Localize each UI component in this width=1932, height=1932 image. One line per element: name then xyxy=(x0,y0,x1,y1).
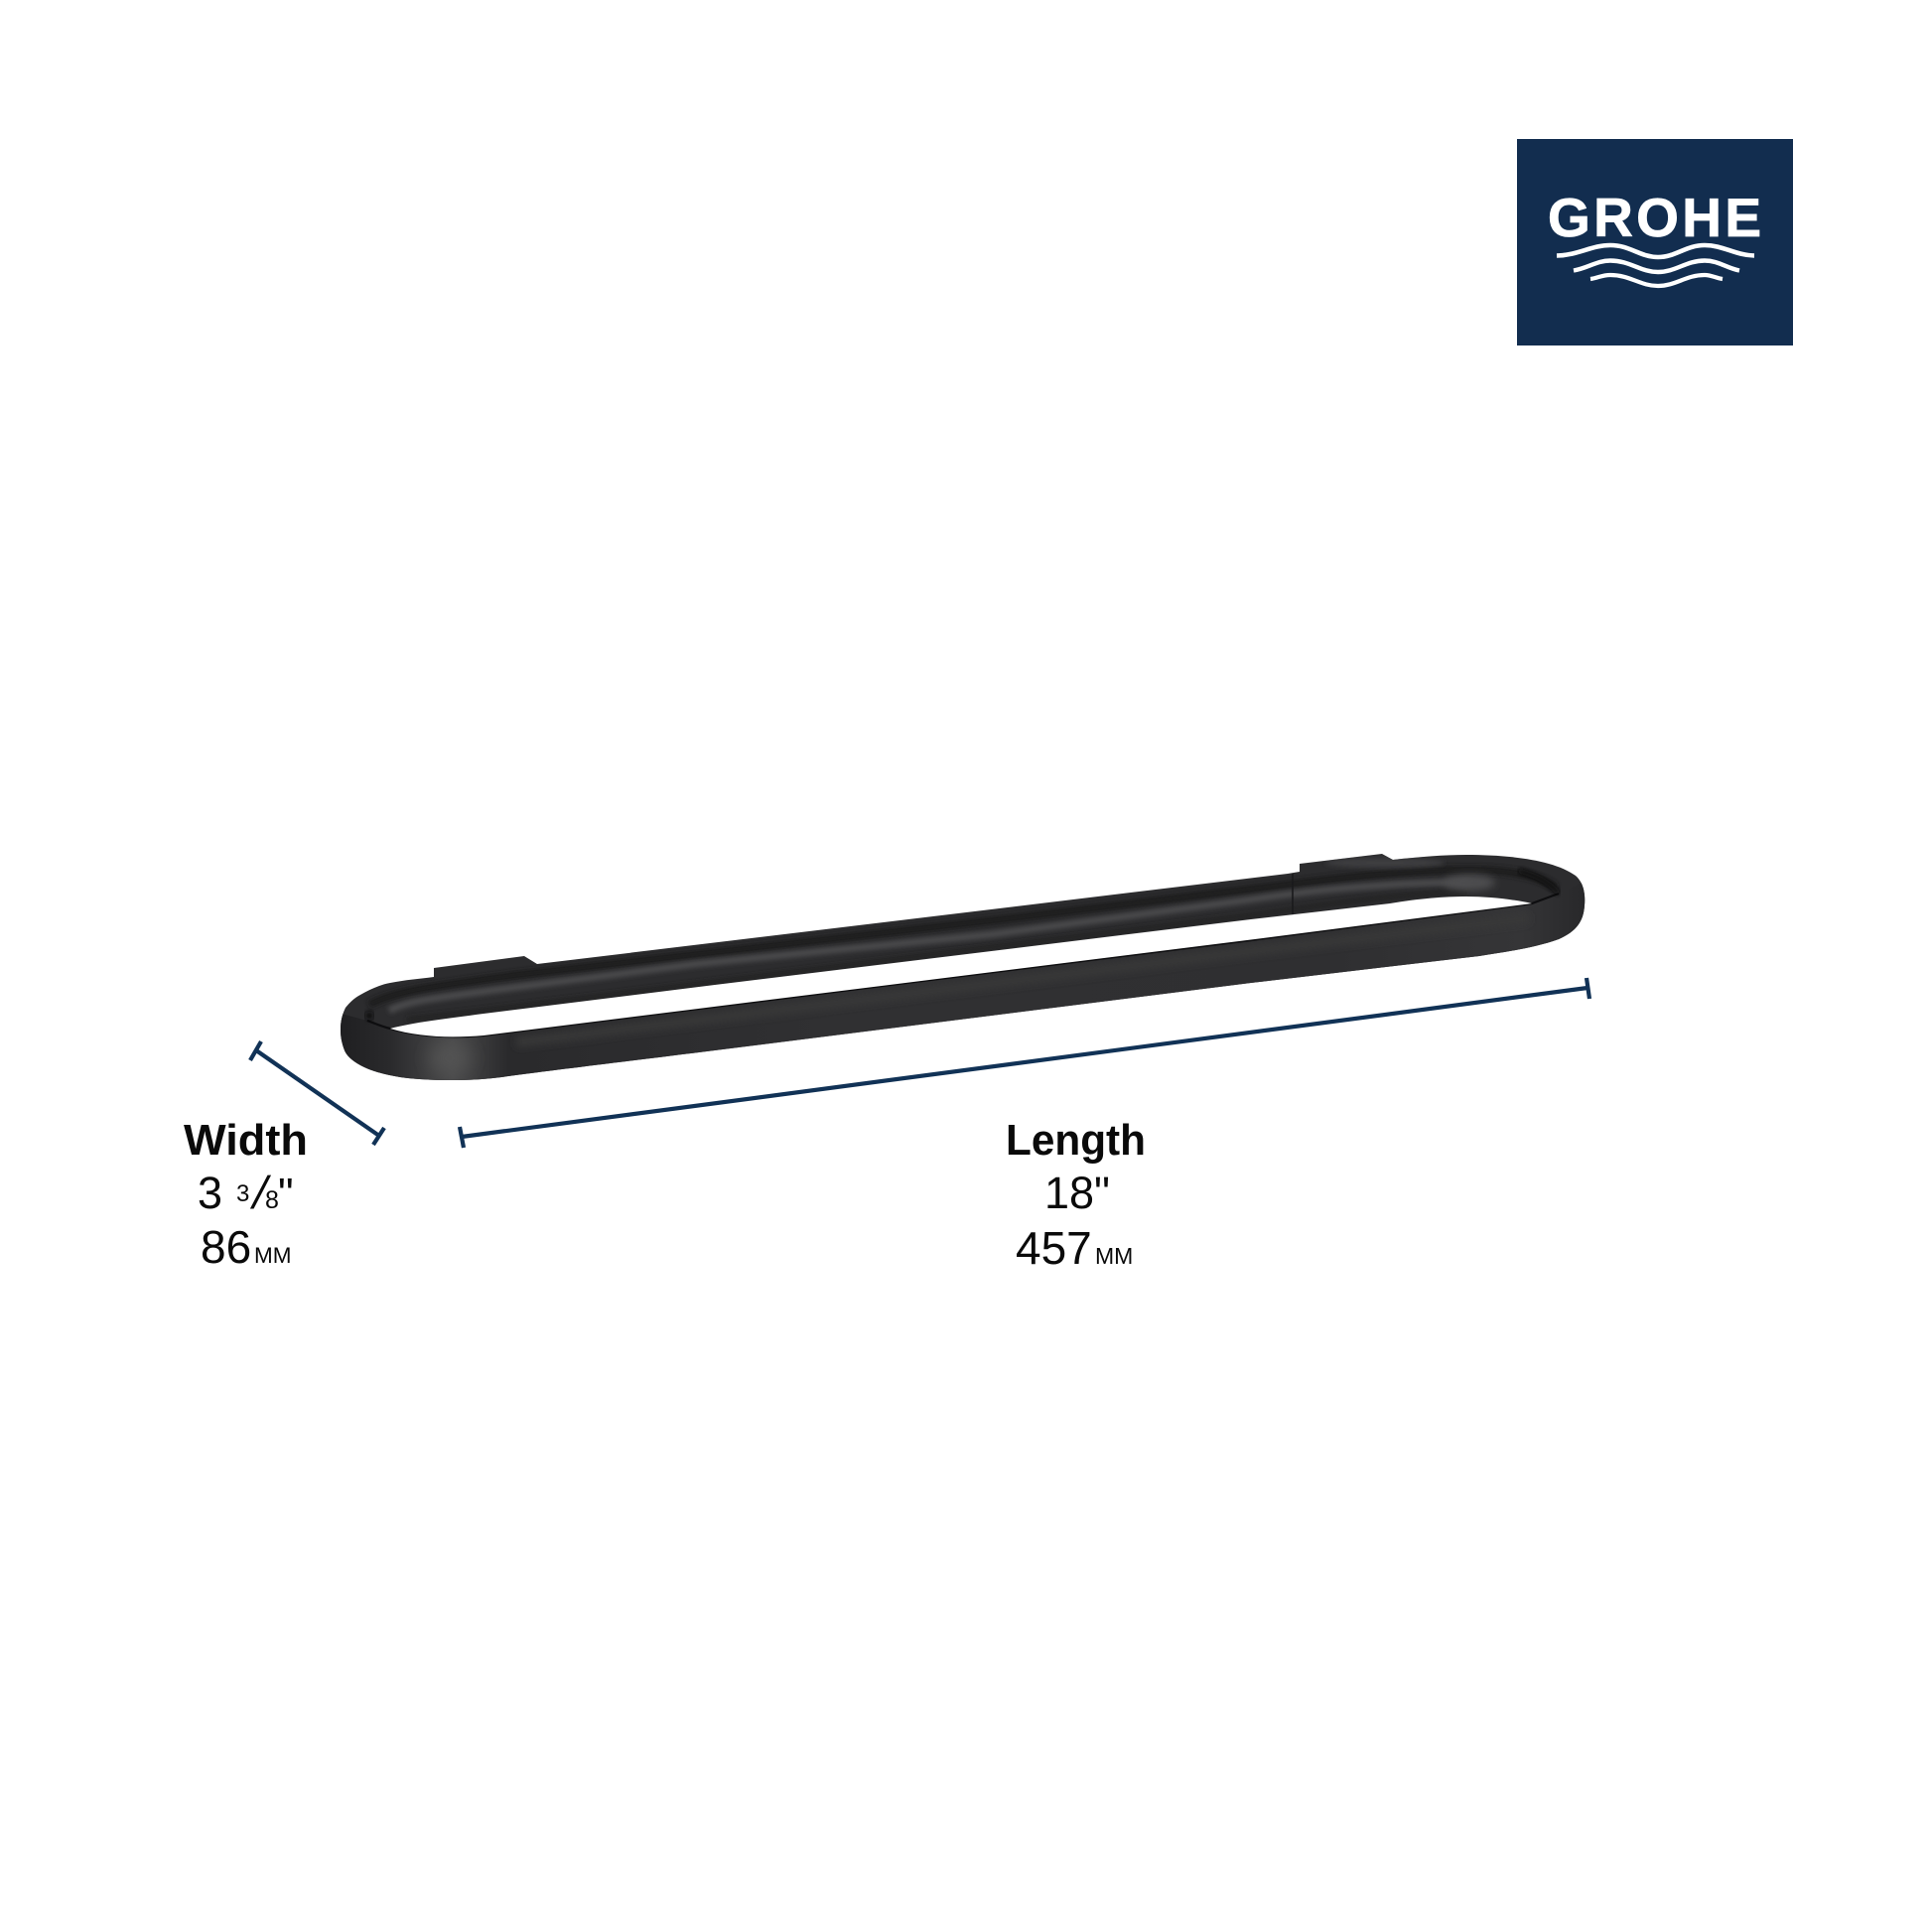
front band xyxy=(338,880,1588,1092)
width label xyxy=(184,1116,308,1273)
rail body xyxy=(341,854,1585,1080)
length dimension line xyxy=(460,978,1589,1148)
logo: GROHE xyxy=(1517,139,1793,345)
rail shading xyxy=(369,870,1556,1005)
width in inches: 3 xyxy=(198,1168,222,1218)
width in inches: 3 xyxy=(236,1180,249,1207)
width in inches: / xyxy=(248,1168,273,1218)
width in millimetres: MM xyxy=(254,1243,292,1268)
width in millimetres xyxy=(201,1221,292,1273)
width in millimetres: 86 xyxy=(201,1221,251,1273)
width dimension line xyxy=(250,1041,384,1145)
front band top edge xyxy=(367,894,1559,1036)
width in inches xyxy=(198,1168,294,1218)
inner shadow right xyxy=(1519,871,1559,894)
logo wordmark: GROHE xyxy=(1548,187,1761,248)
length in inches: 18" xyxy=(1044,1168,1110,1218)
length heading: Length xyxy=(1006,1116,1146,1165)
width heading: Width xyxy=(184,1116,308,1165)
logo waves xyxy=(1557,245,1754,286)
width in inches: " xyxy=(278,1170,294,1218)
bracket collar xyxy=(1292,874,1294,916)
length in millimetres: 457 xyxy=(1016,1222,1092,1274)
dimension infographic xyxy=(184,139,1793,1265)
rail opening xyxy=(390,897,1532,1036)
dimple left xyxy=(365,1011,373,1021)
length label xyxy=(1006,1116,1146,1274)
length in millimetres: MM xyxy=(1095,1243,1133,1269)
width in inches: 8 xyxy=(265,1186,279,1214)
length in millimetres xyxy=(1016,1222,1133,1274)
product: matte black towel rail xyxy=(338,854,1588,1092)
